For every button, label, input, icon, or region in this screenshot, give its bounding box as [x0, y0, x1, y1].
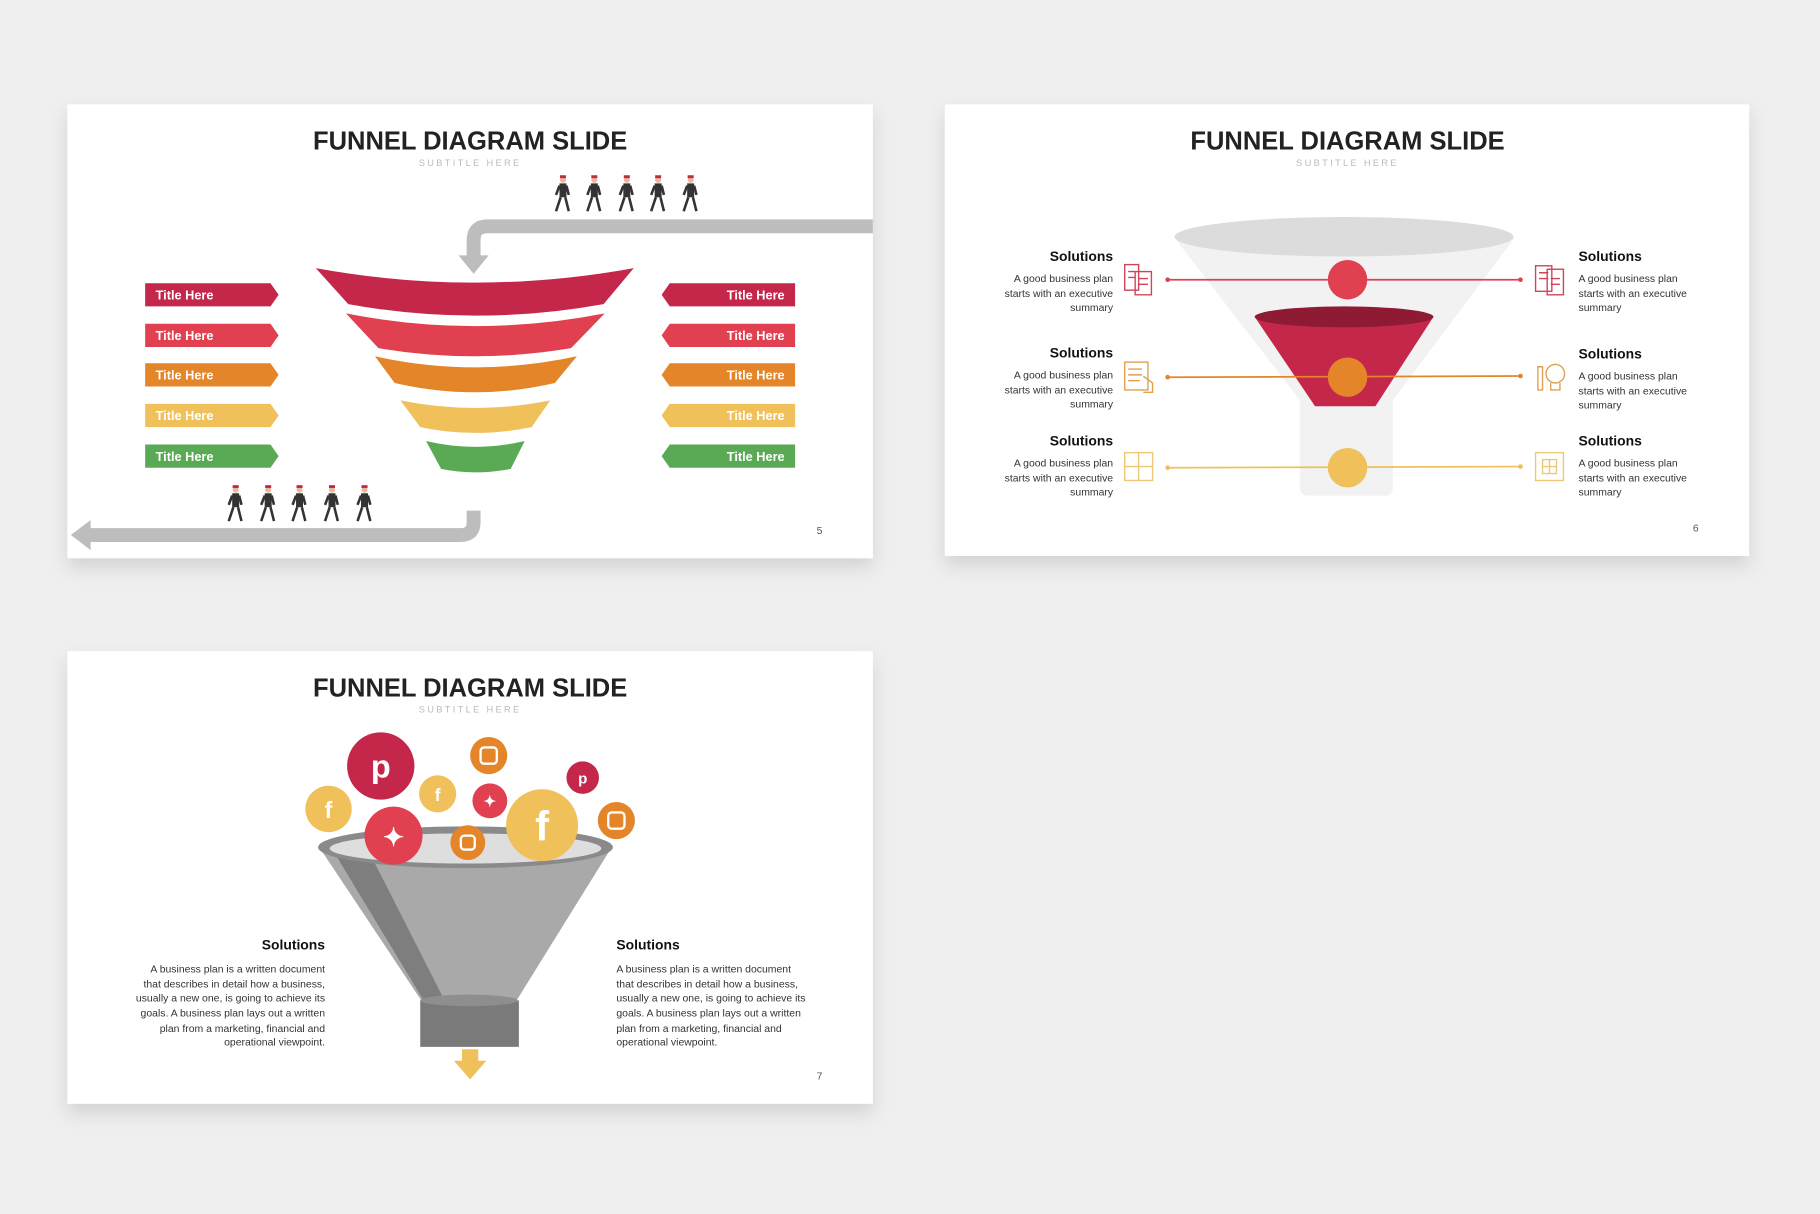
- icons: [1125, 265, 1565, 480]
- icon: people bottom: [229, 485, 370, 521]
- title: FUNNEL DIAGRAM SLIDE: [313, 674, 627, 702]
- left text blocks: A good business plan: [1014, 370, 1113, 381]
- left text blocks: A good business plan: [1014, 459, 1113, 470]
- subtitle: SUBTITLE HERE: [419, 705, 522, 715]
- right labels: [662, 283, 795, 468]
- right text block: Solutions: [616, 936, 680, 952]
- right text block: goals. A business plan lays out a written: [616, 1009, 801, 1020]
- right text block: [616, 936, 806, 1049]
- right text block: that describes in detail how a business,: [616, 980, 798, 991]
- social icons: p: [371, 749, 391, 785]
- arrow: output: [454, 1049, 486, 1079]
- right text blocks: A good business plan: [1579, 459, 1678, 470]
- subtitle: SUBTITLE HERE: [1296, 158, 1399, 168]
- left labels: Title Here: [156, 449, 213, 464]
- social icons: f: [435, 785, 441, 805]
- left text block: [136, 936, 325, 1049]
- left text blocks: summary: [1070, 303, 1114, 314]
- social icons: ✦: [484, 794, 496, 811]
- left text block: Solutions: [262, 936, 325, 952]
- title: FUNNEL DIAGRAM SLIDE: [1190, 128, 1505, 156]
- right text blocks: starts with an executive: [1579, 387, 1687, 398]
- right text blocks: A good business plan: [1579, 274, 1678, 285]
- social icons: f: [325, 797, 333, 823]
- panel: slide 6 funnel with solutions: [945, 104, 1749, 556]
- left labels: [145, 283, 279, 468]
- left text blocks: A good business plan: [1014, 274, 1113, 285]
- social icons: ✦: [383, 824, 404, 852]
- funnel bands: [316, 268, 634, 472]
- left text blocks: Solutions: [1050, 344, 1113, 360]
- right text blocks: starts with an executive: [1579, 474, 1687, 485]
- right text blocks: summary: [1579, 401, 1622, 412]
- arrow: outgoing: [71, 511, 474, 550]
- arrow: incoming: [459, 226, 873, 274]
- right labels: Title Here: [727, 328, 785, 343]
- left text blocks: Solutions: [1050, 248, 1113, 264]
- left text block: that describes in detail how a business,: [143, 980, 325, 991]
- page number: 6: [1693, 524, 1699, 535]
- right text blocks: A good business plan: [1579, 372, 1678, 383]
- right text blocks: Solutions: [1579, 346, 1642, 362]
- funnel graphic: [1175, 217, 1515, 496]
- left text block: A business plan is a written document: [150, 965, 325, 976]
- social icons: [305, 732, 635, 865]
- right text blocks: summary: [1579, 488, 1622, 499]
- subtitle: SUBTITLE HERE: [419, 158, 522, 168]
- funnel graphic: [318, 826, 613, 1047]
- right labels: Title Here: [727, 408, 785, 423]
- left labels: Title Here: [156, 408, 213, 423]
- right text blocks: summary: [1579, 303, 1622, 314]
- funnel dots: [1328, 260, 1367, 487]
- panel: slide 7 social funnel: [67, 651, 873, 1104]
- right text blocks: Solutions: [1579, 433, 1642, 449]
- right text block: A business plan is a written document: [616, 965, 791, 976]
- left labels: Title Here: [156, 287, 213, 302]
- title: FUNNEL DIAGRAM SLIDE: [313, 128, 627, 156]
- right labels: Title Here: [727, 368, 785, 383]
- icon: people top: [556, 175, 696, 211]
- left text blocks: summary: [1070, 488, 1114, 499]
- right text block: plan from a marketing, financial and: [616, 1024, 782, 1035]
- page number: 5: [817, 526, 823, 537]
- right text blocks: [1579, 248, 1687, 499]
- left labels: Title Here: [156, 328, 213, 343]
- left text block: usually a new one, is going to achieve its: [136, 994, 325, 1005]
- left text blocks: Solutions: [1050, 433, 1113, 449]
- connector lines: [1165, 277, 1523, 470]
- panel: slide 5 funnel with labels: [67, 104, 873, 558]
- social icons: f: [535, 802, 549, 849]
- left text blocks: starts with an executive: [1005, 289, 1113, 300]
- page number: 7: [817, 1071, 823, 1082]
- left text block: operational viewpoint.: [224, 1038, 325, 1049]
- left text block: goals. A business plan lays out a written: [141, 1009, 325, 1020]
- left text blocks: [1005, 248, 1114, 499]
- right text block: operational viewpoint.: [616, 1038, 717, 1049]
- left text blocks: summary: [1070, 399, 1114, 410]
- right text blocks: Solutions: [1579, 248, 1642, 264]
- left labels: Title Here: [156, 368, 213, 383]
- left text blocks: starts with an executive: [1005, 385, 1113, 396]
- right labels: Title Here: [727, 287, 785, 302]
- right text blocks: starts with an executive: [1579, 289, 1687, 300]
- right text block: usually a new one, is going to achieve its: [616, 994, 806, 1005]
- right labels: Title Here: [727, 449, 785, 464]
- social icons: p: [578, 770, 587, 787]
- left text block: plan from a marketing, financial and: [160, 1024, 325, 1035]
- left text blocks: starts with an executive: [1005, 474, 1113, 485]
